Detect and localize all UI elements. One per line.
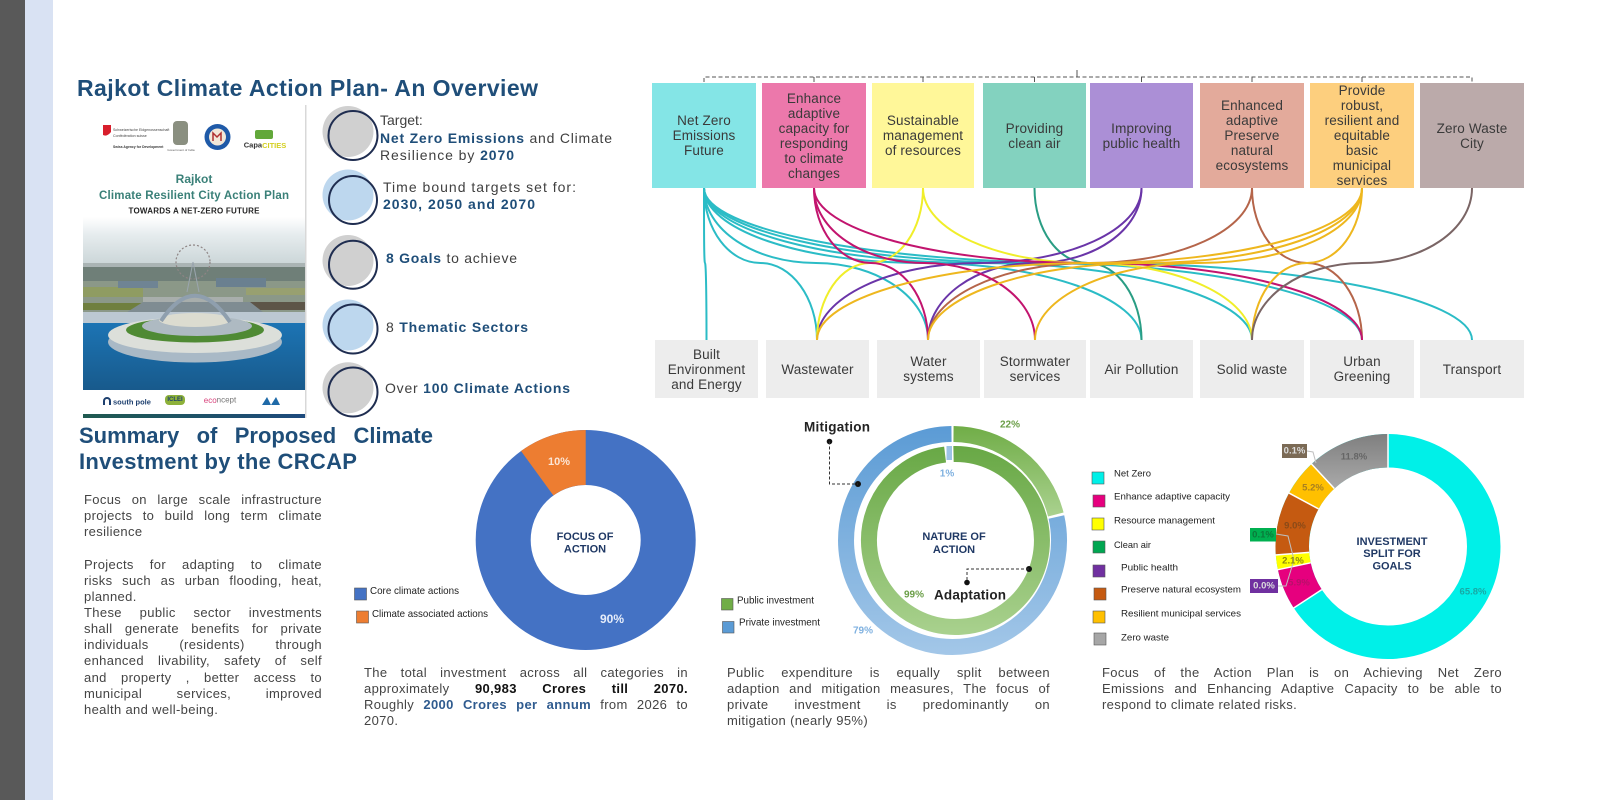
sector: urban greening: Urban	[1343, 354, 1381, 369]
item: 8 thematic sectors	[322, 300, 528, 354]
donut chart: investment split for goals: 2.1%	[1282, 556, 1304, 566]
heading: Investment by the CRCAP	[79, 449, 357, 474]
item: net zero target: Net Zero Emissions and Climate	[380, 130, 612, 146]
description text: The total investment across all categories in	[364, 665, 688, 680]
summary text: shall generate benefits for private	[84, 621, 322, 636]
sector: solid waste	[1200, 340, 1304, 398]
goal: municipal services: basic	[1346, 143, 1378, 158]
description text: approximately 90,983 Crores till 2070.	[364, 681, 688, 696]
panel: investment summary	[79, 423, 433, 717]
goal: ecosystems: ecosystems	[1216, 158, 1288, 173]
report cover image: CapaCITIES	[244, 140, 286, 150]
item: time bound targets: 2030, 2050 and 2070	[383, 196, 535, 212]
summary text	[84, 492, 322, 717]
goal: zero waste: Zero Waste	[1437, 120, 1507, 136]
description text: adaption and mitigation measures, The focus of	[727, 681, 1050, 696]
donut chart: investment split for goals: Resource management	[1114, 516, 1215, 526]
goal: net zero	[652, 83, 756, 188]
donut chart: nature of action: 22%	[1000, 420, 1020, 430]
donut chart: investment split for goals: 0.1%	[1284, 446, 1306, 456]
goal: ecosystems: natural	[1231, 143, 1273, 158]
panel: nature of action chart	[721, 420, 1067, 728]
item: net zero target: Resilience by 2070	[380, 147, 514, 163]
donut chart: nature of action: 1%	[940, 468, 954, 480]
item: 8 goals	[322, 235, 517, 289]
description text: 2070.	[364, 713, 398, 728]
heading	[79, 423, 433, 474]
summary text: Focus on large scale infrastructure	[84, 492, 322, 507]
summary text: projects to build long term climate	[84, 508, 322, 523]
goal: ecosystems: Enhanced	[1221, 98, 1283, 113]
goal: municipal services: services	[1337, 173, 1387, 188]
donut chart: nature of action: ACTION	[933, 544, 975, 556]
report cover image: TOWARDS A NET-ZERO FUTURE	[128, 206, 260, 216]
donut chart: investment split for goals	[1092, 434, 1500, 659]
goal: zero waste: City	[1460, 136, 1484, 150]
goal: municipal services: Provide	[1339, 83, 1385, 98]
summary text: resilience	[84, 524, 142, 539]
donut chart: focus of action: 10%	[548, 456, 570, 468]
panel: focus of action chart	[354, 430, 696, 728]
goal: resources: management	[883, 128, 963, 143]
goal: municipal services: resilient and	[1325, 113, 1399, 128]
item: time bound targets	[322, 170, 576, 224]
report cover image: ICLEI	[167, 397, 183, 403]
summary text: Projects for adapting to climate	[84, 557, 322, 572]
sector: stormwater	[984, 340, 1086, 398]
goal: municipal services	[1310, 83, 1414, 188]
connector diagram: goals mapped to sectors	[703, 70, 1473, 340]
goal: net zero: Net Zero	[677, 113, 731, 128]
donut chart: nature of action: NATURE OF	[922, 531, 986, 543]
goal: adaptive capacity	[762, 83, 866, 188]
donut chart: investment split for goals: Public health	[1121, 562, 1178, 574]
goal: municipal services: municipal	[1333, 158, 1391, 173]
donut chart: focus of action: FOCUS OF	[557, 531, 614, 543]
sector: transport: Transport	[1443, 362, 1501, 376]
donut chart: investment split for goals: Net Zero	[1114, 468, 1151, 480]
report cover image	[83, 105, 306, 418]
goal: adaptive capacity: changes	[788, 166, 840, 180]
description text: respond to climate related risks.	[1102, 697, 1297, 712]
summary text: individuals (residents) through	[84, 637, 322, 652]
description text: mitigation (nearly 95%)	[727, 713, 868, 728]
report cover image: Confédération suisse	[113, 134, 147, 138]
sector: wastewater	[766, 340, 869, 398]
goal: net zero: Emissions	[673, 128, 735, 143]
description text: private investment is predominantly on	[727, 697, 1050, 712]
sector: water systems: Water	[910, 354, 947, 369]
donut chart: investment split for goals: 0.0%	[1253, 580, 1275, 592]
sector: urban greening: Greening	[1334, 369, 1390, 384]
sector: wastewater: Wastewater	[781, 362, 854, 376]
item: time bound targets: Time bound targets set for:	[383, 179, 576, 195]
item: 8 goals: 8 Goals to achieve	[386, 250, 517, 266]
description text	[1102, 665, 1502, 712]
sector: water systems: systems	[903, 369, 954, 384]
report cover image: Government of India	[167, 148, 195, 152]
panel: goals to sectors network	[652, 70, 1524, 398]
goal: public health: Improving	[1111, 120, 1172, 136]
report cover image: econcept	[204, 396, 237, 404]
summary text: health and well-being.	[84, 702, 218, 717]
sector: built environment: and Energy	[671, 376, 742, 392]
donut chart: nature of action: Mitigation	[804, 420, 870, 434]
summary text: and property , better access to	[84, 670, 322, 685]
goal: ecosystems	[1200, 83, 1304, 188]
donut chart: investment split for goals: INVESTMENT	[1357, 536, 1428, 548]
panel: overview	[77, 75, 612, 418]
donut chart: investment split for goals: Preserve natural ecosystem	[1121, 584, 1241, 596]
donut chart: investment split for goals: SPLIT FOR	[1363, 548, 1421, 560]
goal: ecosystems: adaptive	[1226, 113, 1278, 128]
sector: built environment	[655, 340, 758, 398]
donut chart: investment split for goals: 11.8%	[1341, 452, 1368, 462]
donut chart: investment split for goals: GOALS	[1372, 560, 1412, 572]
goal: adaptive capacity: adaptive	[788, 106, 840, 120]
item: net zero target: Target:	[380, 112, 423, 128]
donut chart: investment split for goals: 5.9%	[1288, 578, 1310, 588]
description text	[364, 665, 688, 728]
description text	[727, 665, 1050, 728]
donut chart: investment split for goals: Enhance adaptive capacity	[1114, 492, 1230, 502]
description text: Focus of the Action Plan is on Achieving Net Zero	[1102, 665, 1502, 680]
sector: air pollution	[1090, 340, 1193, 398]
donut chart: focus of action: ACTION	[564, 544, 606, 556]
donut chart: investment split for goals: 0.1%	[1252, 530, 1274, 540]
sector: solid waste: Solid waste	[1217, 362, 1287, 376]
goal: adaptive capacity: Enhance	[787, 90, 841, 106]
donut chart: focus of action: Climate associated actions	[372, 608, 488, 620]
description text: Roughly 2000 Crores per annum from 2026 to	[364, 697, 688, 712]
heading: Summary of Proposed Climate	[79, 423, 433, 448]
description text: Public expenditure is equally split between	[727, 665, 1050, 680]
goal: municipal services: robust,	[1341, 98, 1383, 113]
sector: transport	[1420, 340, 1524, 398]
goal: clean air: clean air	[1008, 136, 1061, 150]
report cover image: Climate Resilient City Action Plan	[99, 190, 289, 202]
item: 100 climate actions	[322, 362, 570, 416]
left sidebar: light blue strip	[25, 0, 53, 800]
goal: public health: public health	[1103, 136, 1180, 150]
donut chart: nature of action: Private investment	[739, 618, 820, 628]
sector: stormwater: Stormwater	[1000, 354, 1070, 369]
donut chart: nature of action: Public investment	[737, 596, 814, 606]
report cover image: south pole	[113, 398, 151, 406]
donut chart: nature of action: Adaptation	[934, 588, 1006, 602]
left sidebar: dark strip	[0, 0, 25, 800]
report cover image: Schweizerische Eidgenossenschaft	[113, 128, 169, 132]
panel: investment split chart	[1092, 434, 1502, 712]
goal: clean air: Providing	[1006, 120, 1063, 136]
donut chart: investment split for goals: 5.2%	[1302, 482, 1324, 494]
item: net zero target	[322, 106, 612, 163]
item: 100 climate actions: Over 100 Climate Actions	[385, 380, 570, 396]
donut chart: investment split for goals: 9.0%	[1284, 520, 1306, 532]
goal: adaptive capacity: responding	[780, 136, 848, 150]
sector: urban greening	[1310, 340, 1414, 398]
item: 8 thematic sectors: 8 Thematic Sectors	[386, 319, 528, 335]
sector: water systems	[877, 340, 980, 398]
sector: built environment: Built	[693, 346, 720, 362]
report cover image: Swiss Agency for Development	[113, 145, 164, 149]
goal: resources	[872, 83, 974, 188]
donut chart: investment split for goals: Resilient municipal services	[1121, 608, 1241, 620]
donut chart: focus of action	[354, 430, 696, 650]
goal: net zero: Future	[684, 143, 724, 158]
title: Rajkot Climate Action Plan- An Overview	[77, 75, 538, 101]
donut chart: focus of action: 90%	[600, 612, 624, 626]
sector: air pollution: Air Pollution	[1104, 362, 1178, 376]
goal: zero waste	[1420, 83, 1524, 188]
donut chart: nature of action: 99%	[904, 590, 924, 600]
donut chart: investment split for goals: Clean air	[1114, 540, 1151, 551]
goal: public health	[1090, 83, 1193, 188]
donut chart: nature of action: 79%	[853, 626, 873, 636]
summary text: planned.	[84, 589, 137, 604]
description text: Emissions and Enhancing Adaptive Capacity to be able to	[1102, 681, 1502, 696]
summary text: enhanced livability, safety of self	[84, 653, 322, 668]
goal: resources: Sustainable	[887, 113, 959, 128]
sector: stormwater: services	[1010, 369, 1060, 384]
donut chart: investment split for goals: Zero waste	[1121, 632, 1169, 644]
summary text: These public sector investments	[84, 605, 322, 620]
report cover image: Rajkot	[176, 172, 212, 186]
goal: ecosystems: Preserve	[1224, 128, 1280, 143]
goal: clean air	[983, 83, 1086, 188]
donut chart: nature of action	[721, 420, 1067, 655]
summary text: municipal services, improved	[84, 686, 322, 701]
sector: built environment: Environment	[668, 362, 745, 376]
summary text: risks such as urban flooding, heat,	[84, 573, 322, 588]
donut chart: investment split for goals: 65.8%	[1460, 586, 1487, 598]
goal: municipal services: equitable	[1334, 128, 1390, 143]
goal: adaptive capacity: capacity for	[779, 120, 849, 136]
goal: resources: of resources	[885, 143, 961, 158]
donut chart: focus of action: Core climate actions	[370, 585, 459, 597]
goal: adaptive capacity: to climate	[784, 150, 844, 166]
